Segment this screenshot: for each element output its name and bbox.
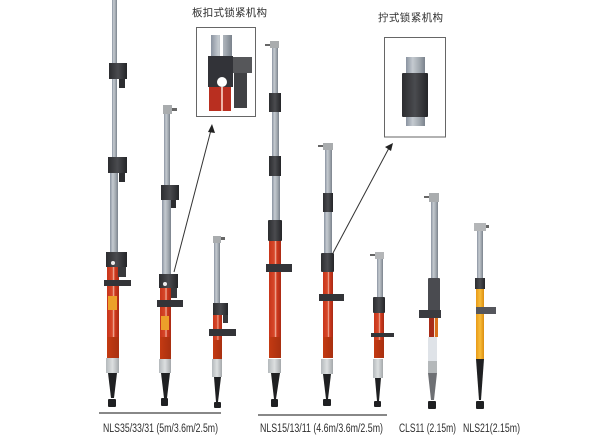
baseline: NLS35 group <box>99 412 221 414</box>
arrow: to lever lock inset <box>174 124 215 272</box>
heading: twist lock mechanism: 拧式锁紧机构 <box>378 11 443 24</box>
inset: lever lock mechanism <box>196 28 256 116</box>
pole: NLS21 2.15m <box>474 223 496 409</box>
pole: NLS13 3.6m <box>318 143 344 406</box>
heading: lever lock mechanism: 板扣式锁紧机构 <box>192 6 267 19</box>
pole: NLS31 2.5m <box>209 236 236 408</box>
pole: CLS11 2.15m <box>419 193 441 409</box>
label: NLS35/33/31: NLS35/33/31 (5m/3.6m/2.5m) <box>103 423 218 435</box>
label: NLS21: NLS21(2.15m) <box>463 423 520 435</box>
pole: NLS33 3.6m <box>157 105 183 406</box>
label: NLS15/13/11: NLS15/13/11 (4.6m/3.6m/2.5m) <box>260 423 383 435</box>
baseline: NLS15 group <box>258 414 387 416</box>
pole: NLS11 2.5m <box>370 252 394 407</box>
pole: NLS35 5m <box>104 0 131 407</box>
inset: twist lock mechanism <box>384 38 446 137</box>
label: CLS11: CLS11 (2.15m) <box>399 423 456 435</box>
pole: NLS15 4.6m <box>265 41 292 407</box>
arrow: to twist lock inset <box>333 143 393 253</box>
